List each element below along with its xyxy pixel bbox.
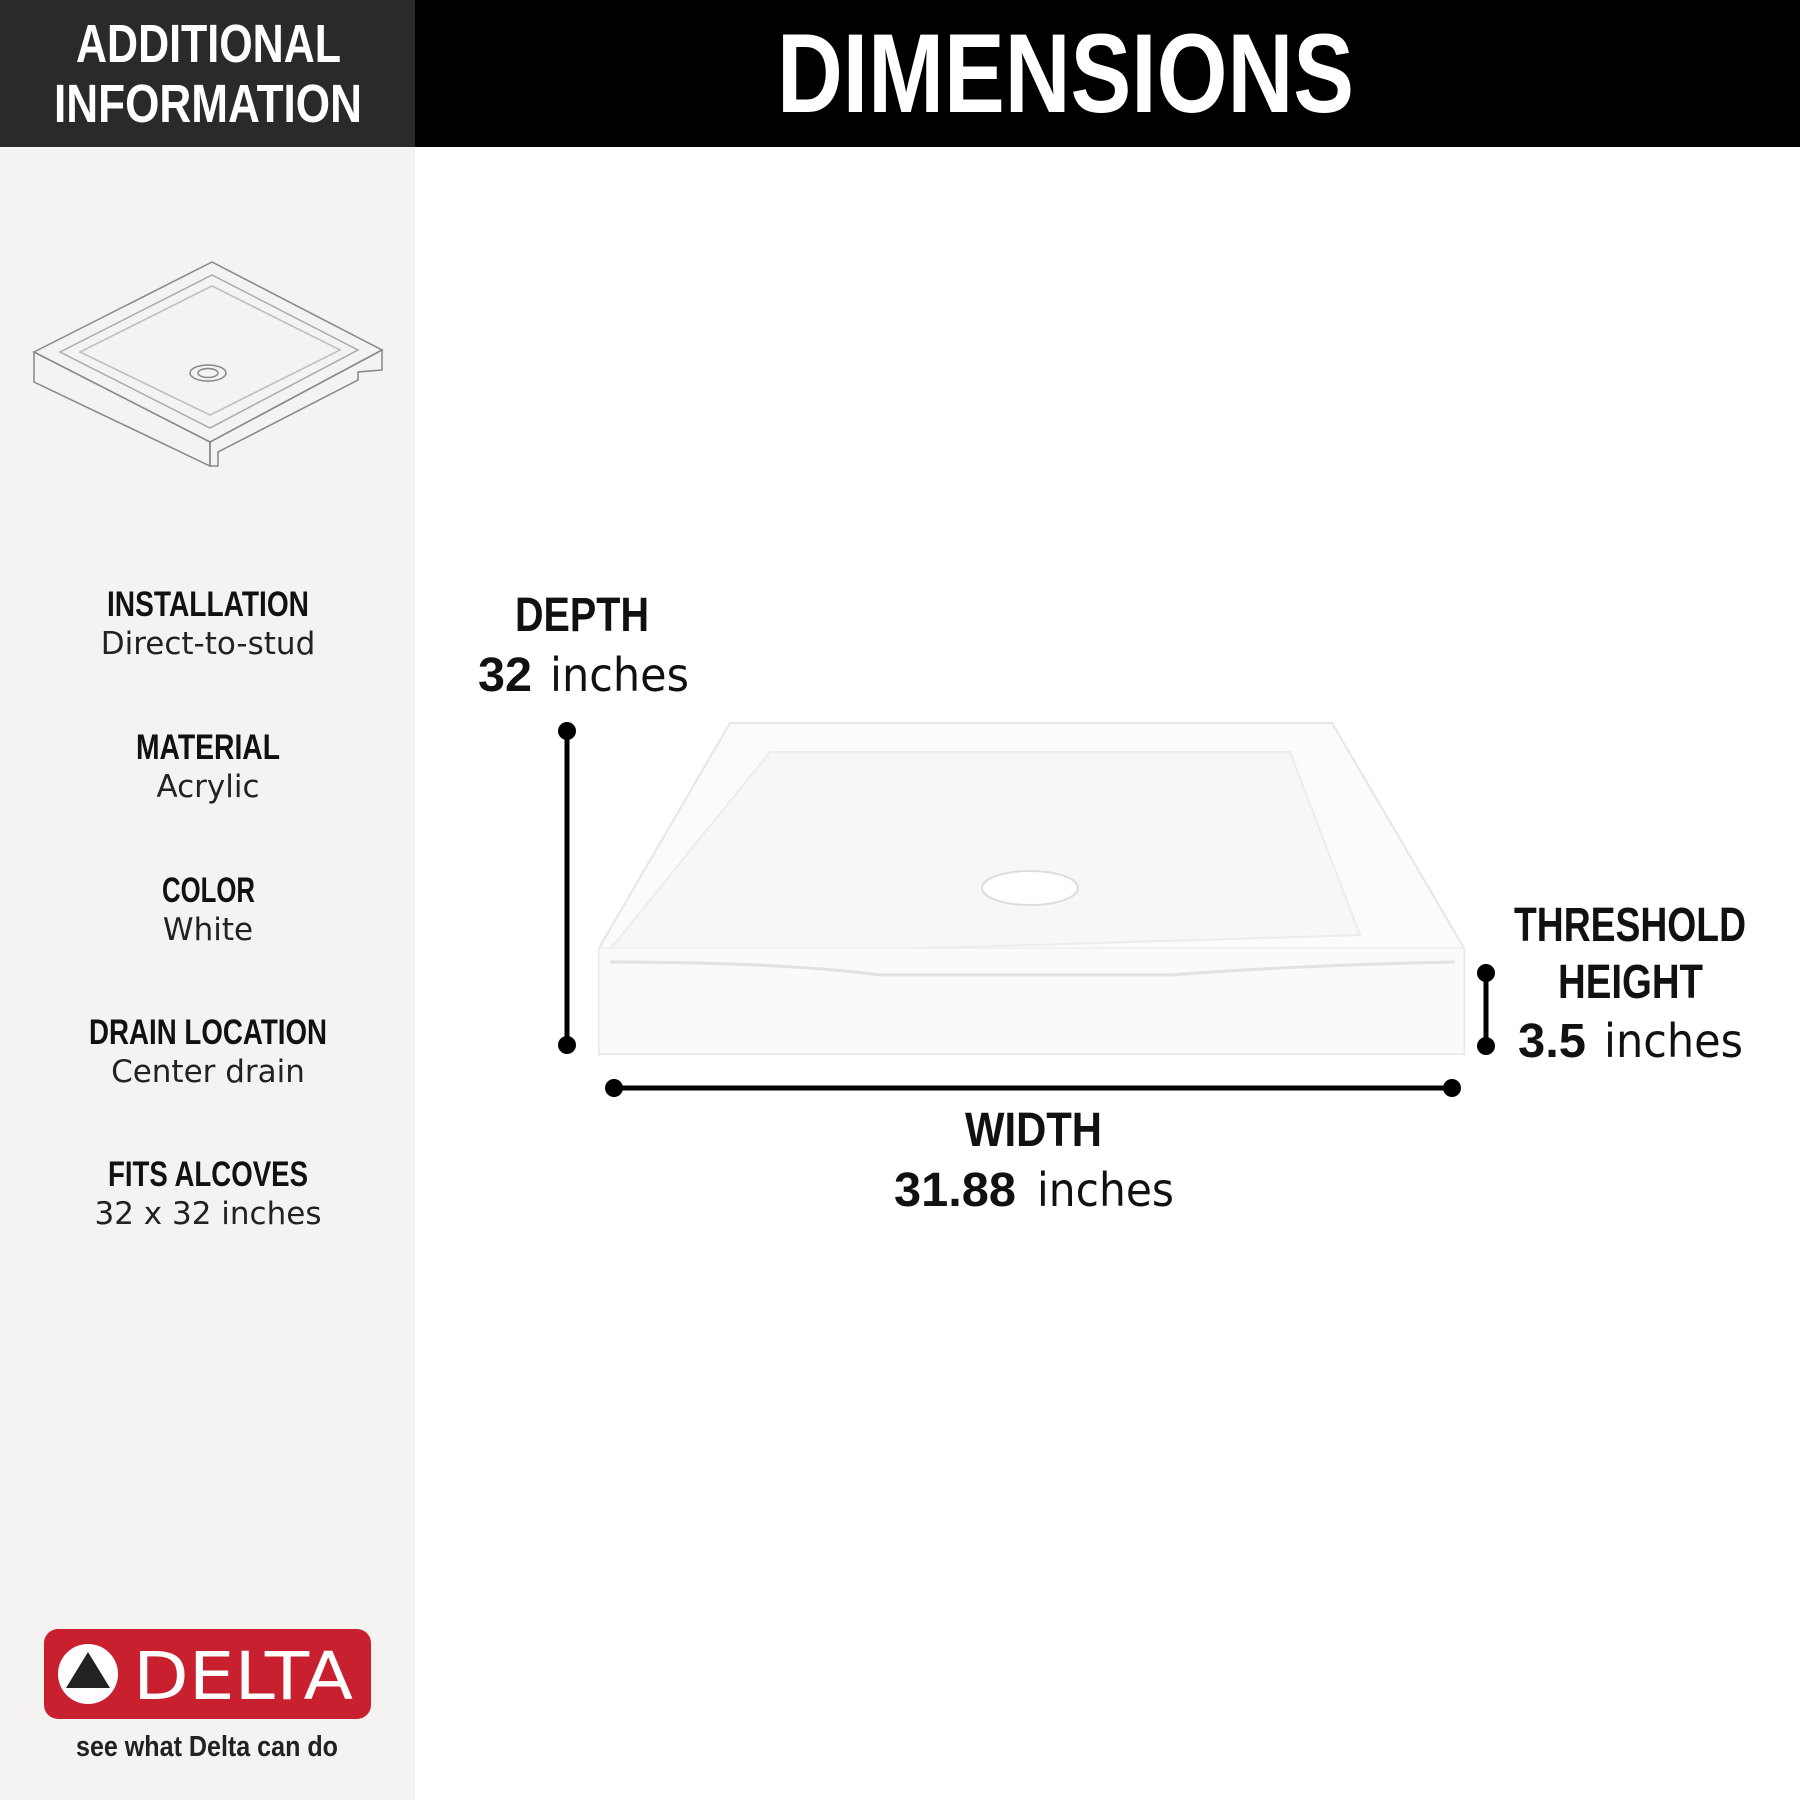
header: additional information bbox=[0, 0, 415, 147]
header: additional information: ADDITIONAL bbox=[76, 14, 341, 74]
spec list: White bbox=[163, 912, 253, 948]
depth dimension: inches bbox=[550, 648, 689, 702]
delta logo: see what Delta can do bbox=[76, 1731, 338, 1763]
spec list: 32 x 32 inches bbox=[95, 1196, 321, 1232]
spec list: COLOR bbox=[162, 871, 255, 910]
spec list: MATERIAL bbox=[136, 728, 280, 767]
depth dimension bbox=[478, 589, 689, 1054]
spec list: Direct-to-stud bbox=[101, 626, 315, 662]
width dimension bbox=[605, 1079, 1461, 1217]
delta logo: DELTA bbox=[133, 1638, 353, 1715]
width dimension: 31.88 bbox=[894, 1164, 1016, 1217]
sidebar background bbox=[0, 0, 415, 1800]
spec list bbox=[89, 585, 327, 1232]
header: additional information: INFORMATION bbox=[54, 74, 362, 134]
delta logo bbox=[44, 1629, 371, 1763]
threshold height dimension: HEIGHT bbox=[1558, 956, 1703, 1009]
width dimension: inches bbox=[1037, 1163, 1174, 1217]
spec list: Center drain bbox=[111, 1054, 305, 1090]
threshold height dimension bbox=[1477, 899, 1746, 1068]
width dimension: WIDTH bbox=[965, 1104, 1102, 1157]
spec list: INSTALLATION bbox=[107, 585, 309, 624]
spec list: Acrylic bbox=[156, 769, 260, 805]
depth dimension: 32 bbox=[478, 649, 532, 702]
threshold height dimension: inches bbox=[1604, 1014, 1743, 1068]
threshold height dimension: 3.5 bbox=[1518, 1015, 1586, 1068]
spec list: DRAIN LOCATION bbox=[89, 1013, 327, 1052]
header: dimensions: DIMENSIONS bbox=[777, 11, 1354, 136]
depth dimension: DEPTH bbox=[515, 589, 649, 642]
spec list: FITS ALCOVES bbox=[108, 1155, 308, 1194]
header: dimensions bbox=[415, 0, 1800, 147]
small tray illustration bbox=[34, 262, 382, 466]
main tray bbox=[599, 723, 1464, 1054]
